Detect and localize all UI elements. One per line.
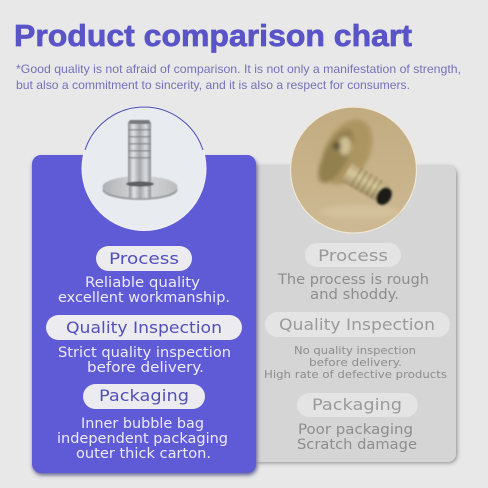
text: quality inspection: Strict quality inspection <box>58 345 231 361</box>
text: packaging <box>297 422 417 453</box>
text: process <box>58 275 230 306</box>
heading pill: process: Process <box>318 246 388 265</box>
heading pill: quality inspection <box>265 312 450 337</box>
heading pill: packaging: Packaging <box>312 395 402 414</box>
text: packaging: Scratch damage <box>297 437 417 453</box>
text: packaging <box>57 416 228 462</box>
text: packaging: independent packaging <box>57 431 228 447</box>
text: process: The process is rough <box>277 272 429 288</box>
text: process: and shoddy. <box>310 287 399 303</box>
panel: competitor product <box>250 107 457 463</box>
text: quality inspection <box>264 344 447 381</box>
subtitle text block: *Good quality is not afraid of comparison. It is not only a manifestation of strength, <box>16 62 461 76</box>
flange <box>102 180 178 200</box>
competitor product photo circle <box>290 107 416 233</box>
heading pill: process: Process <box>109 249 179 268</box>
tube <box>128 122 151 184</box>
heading pill: quality inspection: Quality Inspection <box>66 318 222 337</box>
heading pill: process <box>305 243 401 267</box>
text: quality inspection: No quality inspection <box>294 344 416 357</box>
collar <box>129 183 151 198</box>
text: quality inspection: before delivery. <box>309 356 402 369</box>
text: process: excellent workmanship. <box>58 290 230 306</box>
heading pill: packaging <box>297 393 418 417</box>
subtitle text block <box>16 62 461 92</box>
text: process: Reliable quality <box>85 275 200 291</box>
heading pill: quality inspection: Quality Inspection <box>279 315 435 334</box>
title: Product comparison chart <box>14 19 412 53</box>
panel: quality product <box>32 106 257 475</box>
text: packaging: outer thick carton. <box>76 446 211 462</box>
subtitle text block: but also a commitment to sincerity, and it is also a respect for consumers. <box>16 78 410 92</box>
text: packaging: Inner bubble bag <box>81 416 204 432</box>
text: quality inspection: High rate of defective products <box>264 368 447 381</box>
text: packaging: Poor packaging <box>298 422 413 438</box>
heading pill: packaging: Packaging <box>99 386 189 405</box>
heading pill: process <box>96 246 192 271</box>
text: process <box>277 272 429 303</box>
heading pill: packaging <box>83 384 205 409</box>
text: quality inspection: before delivery. <box>87 360 204 376</box>
heading pill: quality inspection <box>46 315 242 340</box>
text: quality inspection <box>58 345 231 376</box>
quality product photo circle <box>82 106 206 230</box>
